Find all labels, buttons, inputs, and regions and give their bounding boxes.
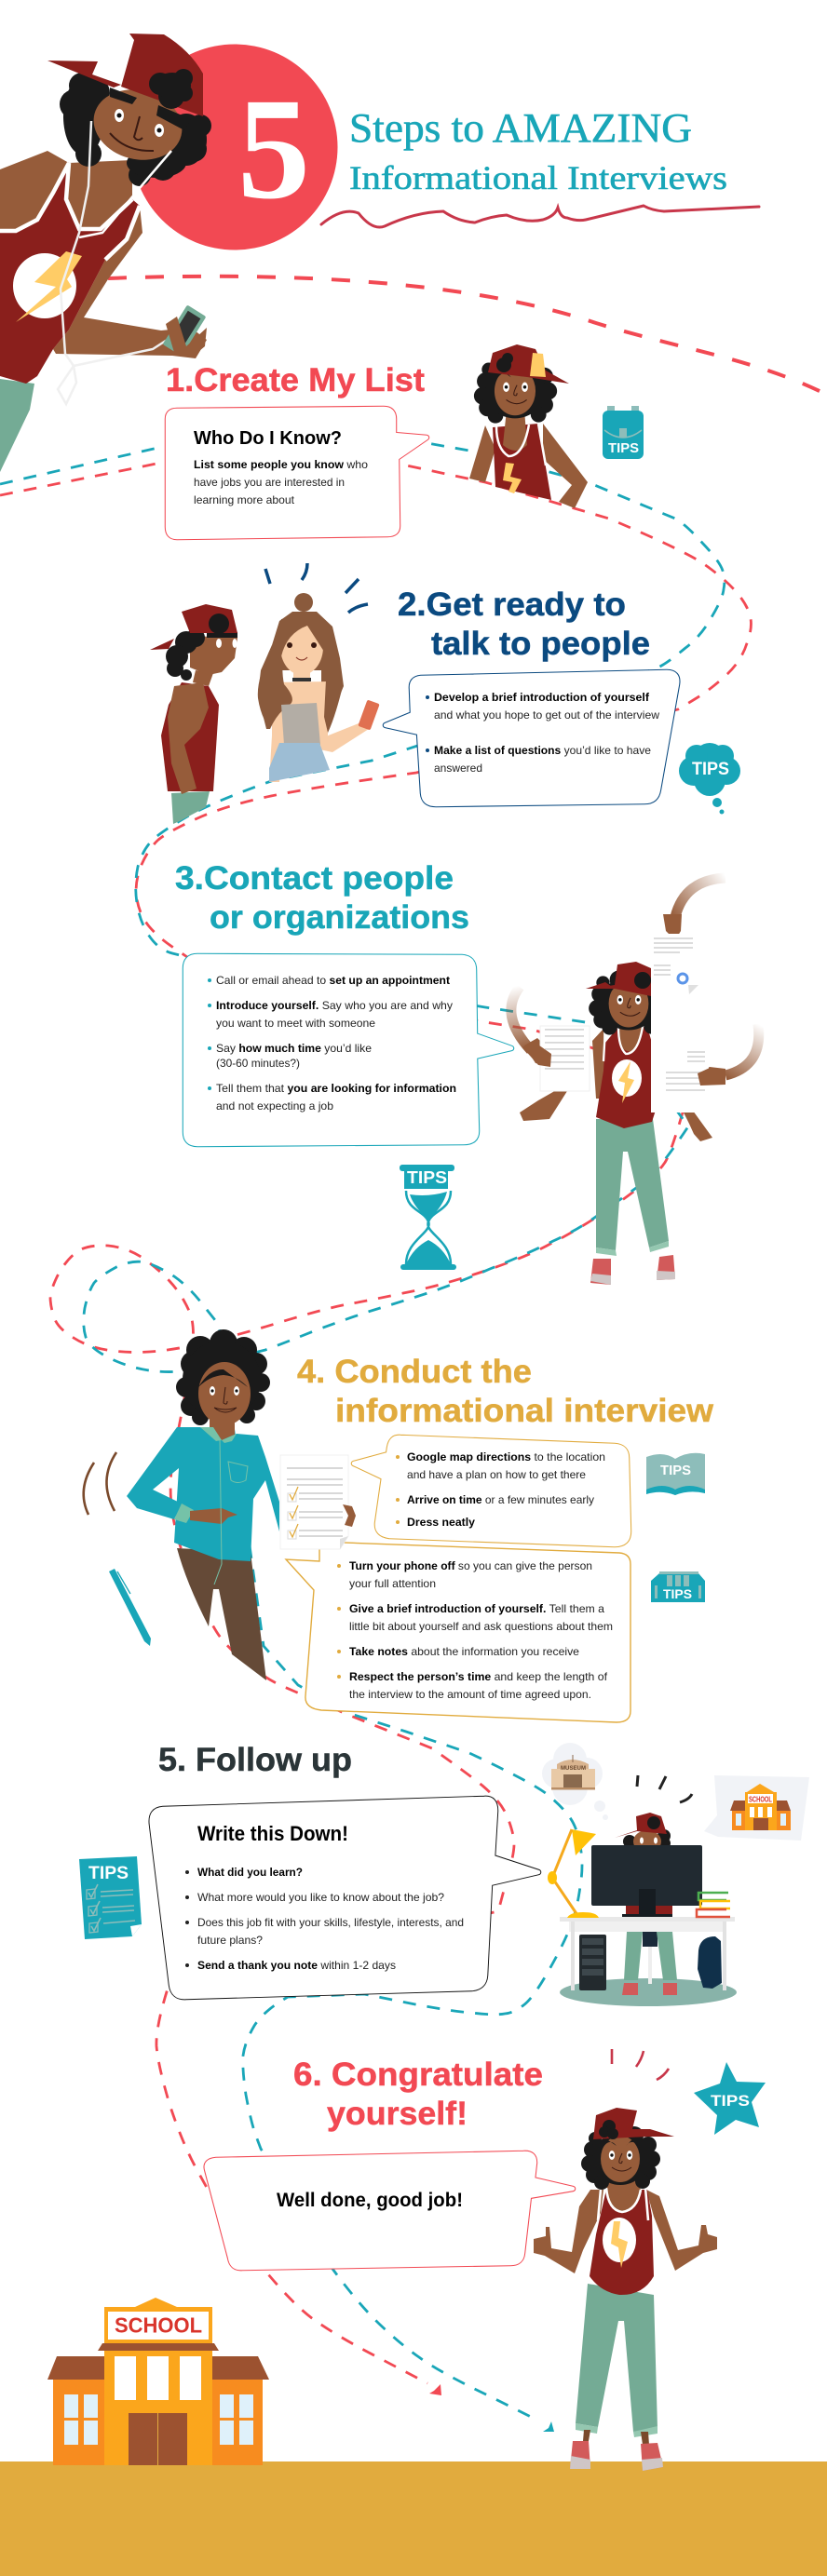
bubble heading: Who Do I Know? xyxy=(194,428,342,449)
arrow: red end xyxy=(429,2384,441,2395)
bubble text: and what you hope to get out of the interview xyxy=(434,708,659,722)
character: step 3 with many hands and papers xyxy=(511,878,759,1285)
heading: step 6 xyxy=(293,2057,543,2132)
bubble text: Tell them that you are looking for information xyxy=(216,1082,456,1095)
teal dashed journey path xyxy=(0,442,725,2421)
bubble text: you want to meet with someone xyxy=(216,1017,375,1030)
bubble text: Arrive on time or a few minutes early xyxy=(407,1493,594,1506)
heading: step 2 xyxy=(398,587,650,662)
bullets xyxy=(208,978,211,1090)
arrow: teal end xyxy=(543,2421,554,2432)
bubble text: have jobs you are interested in xyxy=(194,476,345,489)
heading: step 4: 4. Conduct the xyxy=(297,1354,532,1390)
bubble text: answered xyxy=(434,762,482,775)
backpack xyxy=(698,1936,722,1989)
character: thumbs up xyxy=(534,2108,717,2471)
bubble text: Make a list of questions you’d like to have xyxy=(434,744,651,757)
bullets xyxy=(337,1564,341,1679)
bubble heading: Write this Down! xyxy=(197,1822,348,1845)
title: Informational Interviews xyxy=(349,159,727,196)
bubble text: Does this job fit with your skills, lifestyle, interests, and xyxy=(197,1916,464,1929)
title: Steps to AMAZING xyxy=(349,105,692,151)
character: boy in profile xyxy=(150,604,237,824)
heading: step 2: talk to people xyxy=(431,626,650,662)
bubble text: Say how much time you’d like xyxy=(216,1042,372,1055)
speech bubble: interview details upper xyxy=(354,1437,629,1544)
heading: step 4 xyxy=(297,1354,714,1429)
computer monitor xyxy=(591,1845,702,1918)
desk lamp xyxy=(548,1829,599,1918)
tips icon: hourglass xyxy=(400,1165,456,1270)
bubble text: What did you learn? xyxy=(197,1866,303,1879)
tips icon: building: TIPS xyxy=(663,1586,692,1601)
bubble text xyxy=(434,691,659,775)
bubble text: future plans? xyxy=(197,1934,263,1947)
bubble text: Respect the person’s time and keep the length of xyxy=(349,1670,608,1683)
red circle xyxy=(132,45,337,250)
head above monitor xyxy=(615,1813,671,1853)
bubble text: What more would you like to know about the job? xyxy=(197,1891,444,1904)
heading: step 5: 5. Follow up xyxy=(158,1742,352,1778)
bubble text: Introduce yourself. Say who you are and why xyxy=(216,999,453,1012)
bubble text: Take notes about the information you receive xyxy=(349,1645,579,1658)
bubble text: learning more about xyxy=(194,493,295,506)
bubble text: (30-60 minutes?) xyxy=(216,1057,300,1070)
character: step 4 with checklist xyxy=(127,1329,356,1680)
tips icon: backpack xyxy=(603,406,644,459)
desk xyxy=(560,1917,735,1990)
red dashed journey path xyxy=(0,463,751,2383)
tips icon: building xyxy=(651,1571,705,1602)
title xyxy=(349,105,727,196)
icon: pen xyxy=(109,1569,151,1646)
bubble text: List some people you know who xyxy=(194,458,368,471)
bubble text xyxy=(216,974,456,1113)
bullets xyxy=(396,1455,400,1524)
tips icon: star: TIPS xyxy=(711,2092,750,2110)
character: girl with phone xyxy=(258,593,380,782)
heading: step 3 xyxy=(175,860,469,936)
speech bubble: who do I know xyxy=(168,409,427,537)
heading: step 3: 3.Contact people xyxy=(175,860,454,897)
main red dashed path at top xyxy=(108,276,827,395)
thought bubble: school: SCHOOL xyxy=(749,1795,772,1804)
bubble text: your full attention xyxy=(349,1577,436,1590)
tips icon: book: TIPS xyxy=(660,1463,691,1478)
computer tower xyxy=(579,1935,606,1990)
speech bubble: well done xyxy=(207,2153,573,2268)
bubble text: Send a thank you note within 1-2 days xyxy=(197,1959,396,1972)
heading: step 4: informational interview xyxy=(335,1393,714,1429)
bubble text: Google map directions to the location xyxy=(407,1450,605,1463)
numeral 5: 5 xyxy=(237,68,310,229)
bubble text xyxy=(407,1450,605,1529)
desk scene with character at computer xyxy=(548,1813,737,2006)
tips icon: note page xyxy=(79,1856,142,1939)
bubble text xyxy=(197,1866,464,1972)
bubble text: Dress neatly xyxy=(407,1516,475,1529)
tips icon: backpack: TIPS xyxy=(608,440,639,456)
tips icon: note page: TIPS xyxy=(88,1864,129,1883)
bubble text xyxy=(194,458,368,506)
bubble text: Develop a brief introduction of yourself xyxy=(434,691,650,704)
bubble text xyxy=(349,1559,613,1701)
thought cloud: museum xyxy=(542,1743,608,1820)
thought bubble: school xyxy=(704,1775,809,1841)
tips icon: book xyxy=(646,1453,705,1495)
tips icon: cloud: TIPS xyxy=(692,760,729,779)
tips icon: cloud xyxy=(679,743,740,814)
heading: step 6: yourself! xyxy=(327,2096,468,2132)
excitement marks: step 5 xyxy=(637,1775,692,1802)
tips icon: star xyxy=(694,2062,766,2135)
celebration marks xyxy=(612,2049,669,2080)
bubble text: and have a plan on how to get there xyxy=(407,1468,586,1481)
bubble text: Turn your phone off so you can give the person xyxy=(349,1559,592,1572)
speech bubble: write this down xyxy=(152,1799,538,1997)
character: step 1 xyxy=(469,344,588,508)
motion arcs xyxy=(84,1452,116,1515)
school building xyxy=(47,2298,269,2465)
ground band xyxy=(0,2461,827,2576)
title squiggle underline xyxy=(321,206,759,227)
heading: step 6: 6. Congratulate xyxy=(293,2057,543,2093)
bubble text: the interview to the amount of time agreed upon. xyxy=(349,1688,591,1701)
tips icon: hourglass: TIPS xyxy=(407,1168,447,1187)
speech bubble: prepare xyxy=(386,672,677,804)
speech bubble: contact xyxy=(185,956,511,1144)
excitement marks: step 2 xyxy=(265,563,368,613)
checklist paper xyxy=(280,1455,348,1549)
bullets xyxy=(426,695,429,752)
bubble text: and not expecting a job xyxy=(216,1099,333,1113)
thought cloud: museum: MUSEUM xyxy=(561,1765,586,1772)
large character with music player xyxy=(0,34,211,472)
bubble text: little bit about yourself and ask questions about them xyxy=(349,1620,613,1633)
heading: step 2: 2.Get ready to xyxy=(398,587,626,623)
speech bubble: interview details lower xyxy=(286,1542,630,1722)
heading: step 1: 1.Create My List xyxy=(166,362,425,398)
books xyxy=(697,1893,730,1917)
bubble text: Give a brief introduction of yourself. Tell them a xyxy=(349,1602,604,1615)
heading: step 3: or organizations xyxy=(210,899,469,936)
bubble text: Call or email ahead to set up an appointment xyxy=(216,974,450,987)
bullets xyxy=(185,1870,189,1967)
bubble text: Well done, good job! xyxy=(277,2190,463,2211)
school building: SCHOOL xyxy=(115,2313,202,2337)
